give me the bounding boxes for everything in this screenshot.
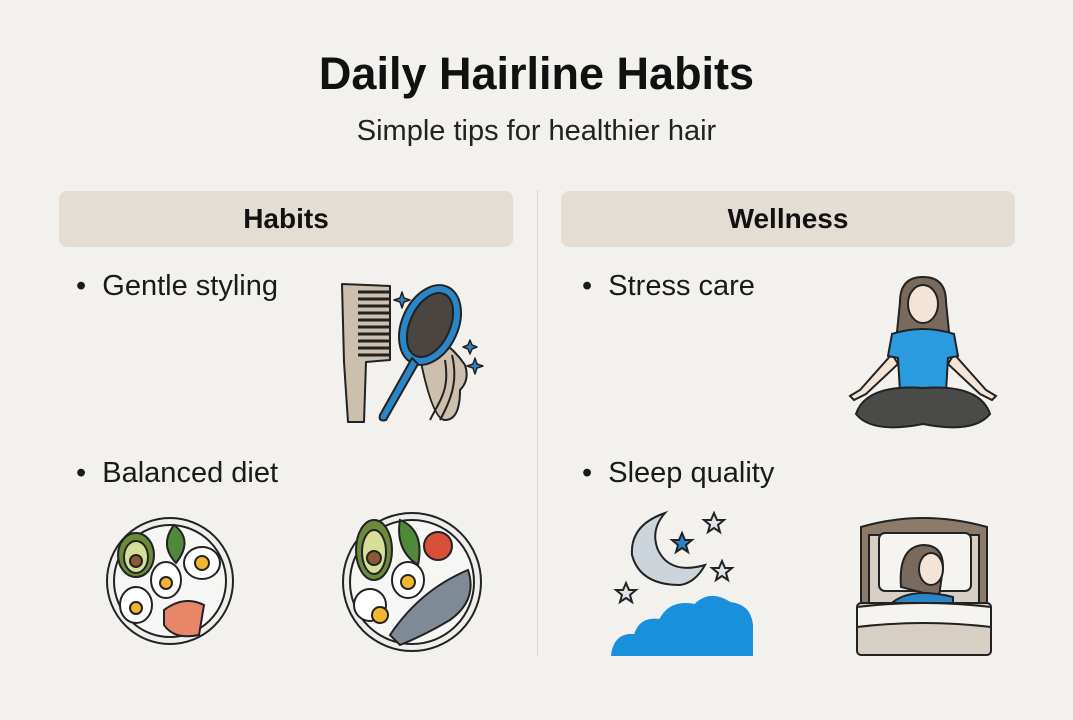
subtitle: Simple tips for healthier hair	[357, 115, 716, 147]
icon: meditation	[848, 276, 998, 428]
icon: plate 1	[106, 517, 234, 645]
bullet: Gentle styling: • Gentle styling	[76, 270, 278, 302]
title: Daily Hairline Habits	[319, 48, 754, 99]
icon: moon, stars, cloud	[610, 510, 753, 656]
panel header: Wellness	[561, 191, 1015, 247]
panel header: Wellness: Wellness	[728, 203, 848, 234]
bullet: Balanced diet: • Balanced diet	[76, 457, 278, 489]
bullet: Sleep quality: • Sleep quality	[582, 457, 774, 489]
panel header: Habits: Habits	[243, 203, 329, 234]
panel header: Habits	[59, 191, 513, 247]
icon: plate 2	[342, 512, 482, 652]
icon: sleeping in bed	[856, 517, 992, 656]
bullet: Stress care: • Stress care	[582, 270, 755, 302]
icon: comb and brush	[341, 283, 484, 423]
